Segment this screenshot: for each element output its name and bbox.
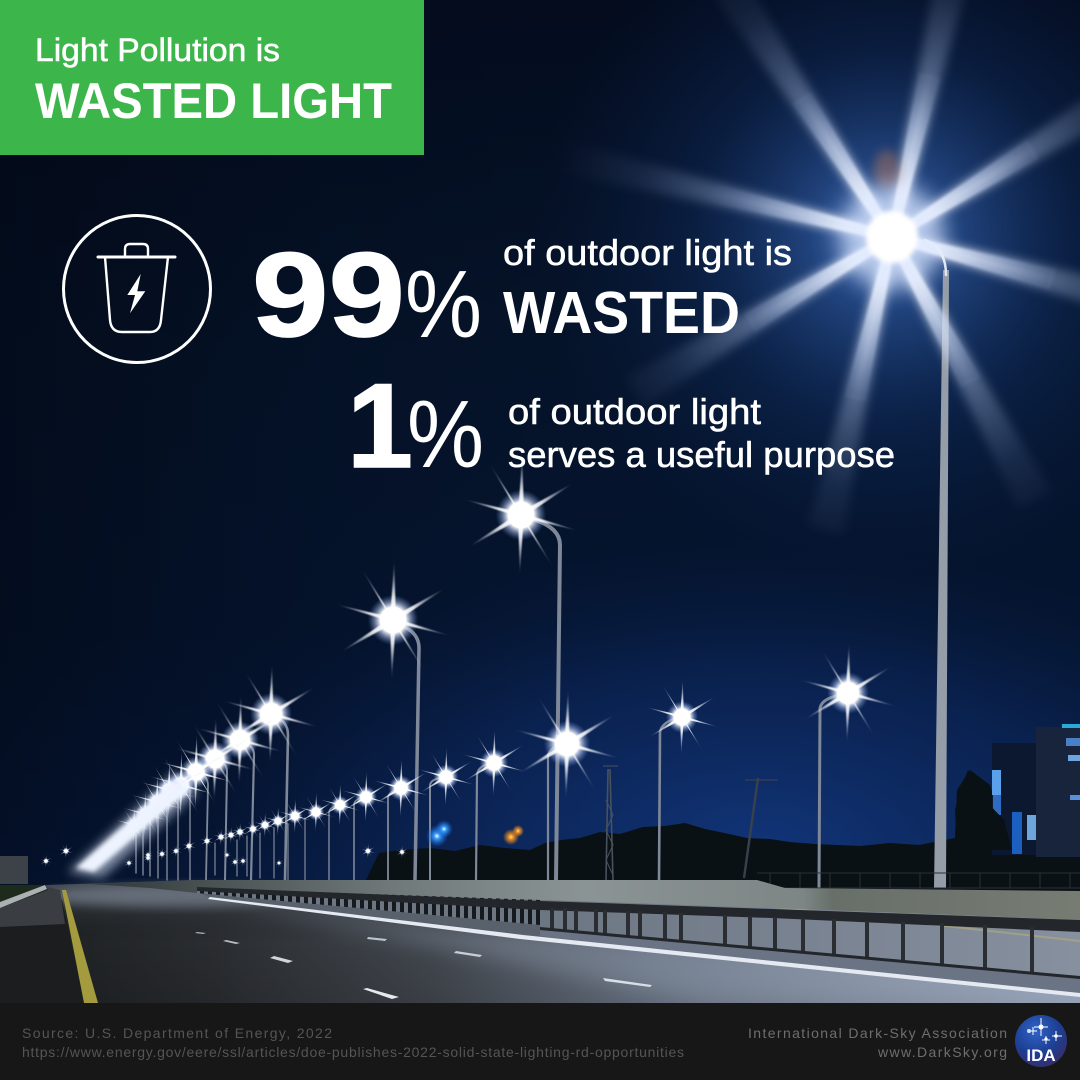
street lamps near row bbox=[39, 455, 896, 878]
percent sign: % bbox=[407, 381, 484, 488]
title line two: WASTED LIGHT bbox=[35, 73, 392, 129]
trees on the horizon bbox=[360, 770, 1080, 892]
icon: IDA logo bbox=[1015, 1015, 1067, 1067]
organisation credit bbox=[748, 1025, 1007, 1060]
caption line: of outdoor light is bbox=[503, 232, 792, 273]
source citation: https://www.energy.gov/eere/ssl/articles/doe-publishes-2022-solid-state-lighting-rd-opportunities bbox=[22, 1044, 684, 1060]
percent sign: % bbox=[405, 251, 482, 358]
icon: IDA logo: IDA bbox=[1026, 1046, 1056, 1065]
footer bar bbox=[0, 1003, 1080, 1080]
source citation bbox=[22, 1025, 684, 1060]
caption line two: serves a useful purpose bbox=[508, 434, 895, 475]
concrete barrier bbox=[90, 880, 1080, 920]
source citation: Source: U.S. Department of Energy, 2022 bbox=[22, 1025, 332, 1041]
fence behind the barrier bbox=[757, 873, 1080, 888]
title banner bbox=[0, 0, 424, 155]
big number 1: 1 bbox=[347, 359, 413, 493]
big foreground lamp flare bbox=[519, 0, 1080, 534]
icon: trash can with lightning bolt bbox=[64, 216, 210, 362]
WASTED label: WASTED bbox=[503, 280, 740, 346]
left side rail and grass bbox=[0, 856, 48, 908]
organisation credit: www.DarkSky.org bbox=[877, 1044, 1007, 1060]
road surface bbox=[0, 880, 1080, 1003]
big number 99: 99 bbox=[252, 228, 405, 362]
city buildings bbox=[955, 724, 1080, 857]
organisation credit: International Dark-Sky Association bbox=[748, 1025, 1007, 1041]
caption line one: of outdoor light bbox=[508, 391, 761, 432]
stat: 1 percent useful bbox=[347, 359, 895, 493]
stat: 99 percent wasted bbox=[252, 228, 792, 362]
street lamp poles bbox=[136, 240, 949, 888]
guard rail bbox=[197, 887, 1080, 979]
pylon and utility pole bbox=[603, 766, 778, 880]
title line one: Light Pollution is bbox=[35, 32, 280, 68]
